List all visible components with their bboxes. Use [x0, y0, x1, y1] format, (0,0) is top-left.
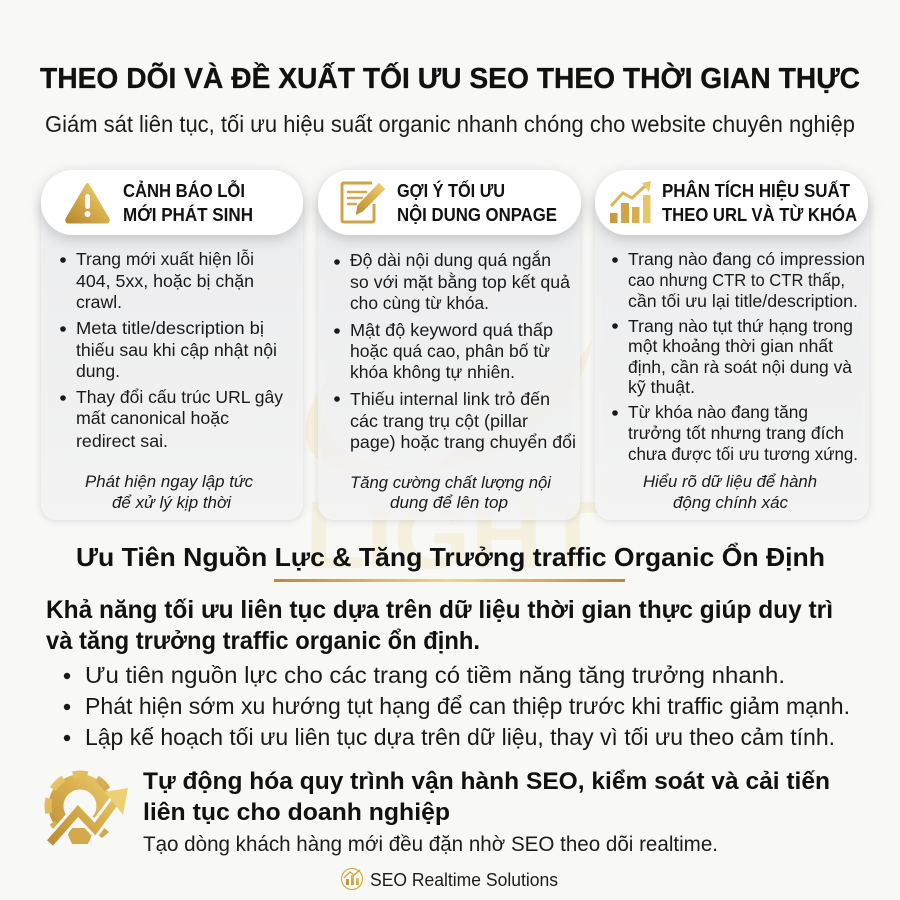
bullet list: hoặc quá cao, phân bố từ — [350, 341, 550, 361]
bullet list: dung. — [76, 361, 120, 381]
icon: bar chart with arrow — [610, 181, 651, 223]
lead statement — [46, 596, 833, 655]
bullet list: thiếu sau khi cập nhật nội — [76, 340, 277, 360]
benefit bullet list — [64, 662, 850, 750]
icon: gear with rising arrow — [40, 774, 128, 856]
bullet list: cao nhưng CTR to CTR thấp, — [628, 270, 845, 290]
lead statement: và tăng trưởng traffic organic ổn định. — [46, 627, 480, 655]
bullet list — [60, 248, 283, 451]
bullet list: chưa được tối ưu tương xứng. — [628, 444, 858, 464]
bullet list: Thay đổi cấu trúc URL gây — [76, 387, 283, 407]
benefit bullet list: Ưu tiên nguồn lực cho các trang có tiềm năng tăng trưởng nhanh. — [85, 662, 785, 688]
panel: phân tích hiệu suất — [595, 170, 869, 520]
heading — [397, 180, 557, 225]
benefit bullet list: Lập kế hoạch tối ưu liên tục dựa trên dữ liệu, thay vì tối ưu theo cảm tính. — [85, 724, 835, 750]
bullet list: khóa không tự nhiên. — [350, 362, 515, 382]
bullet list: 404, 5xx, hoặc bị chặn — [76, 271, 254, 291]
icon: warning triangle — [67, 184, 108, 222]
heading: CẢNH BÁO LỖI — [123, 180, 245, 201]
bullet list: crawl. — [76, 292, 122, 312]
bullet list — [334, 249, 576, 452]
heading: MỚI PHÁT SINH — [123, 204, 253, 225]
heading: PHÂN TÍCH HIỆU SUẤT — [662, 180, 851, 201]
bullet list — [612, 249, 865, 464]
gold underline — [274, 579, 625, 582]
section heading: Ưu Tiên Nguồn Lực & Tăng Trưởng traffic Organic Ổn Định — [76, 542, 825, 572]
title: THEO DÕI VÀ ĐỀ XUẤT TỐI ƯU SEO THEO THỜI GIAN THỰC — [40, 62, 860, 95]
bullet list: một khoảng thời gian nhất — [628, 336, 833, 356]
bullet list: Trang nào tụt thứ hạng trong — [628, 316, 853, 336]
bullet list: trưởng tốt nhưng trang đích — [628, 423, 844, 443]
bullet list: cần tối ưu lại title/description. — [628, 291, 858, 311]
heading — [123, 180, 253, 225]
subtitle: Giám sát liên tục, tối ưu hiệu suất organic nhanh chóng cho website chuyên nghiệp — [45, 111, 855, 137]
bullet list: page) hoặc trang chuyển đổi — [350, 432, 576, 452]
heading: THEO URL VÀ TỪ KHÓA — [662, 204, 857, 225]
footer brand: SEO Realtime Solutions — [370, 870, 558, 890]
lead statement: Khả năng tối ưu liên tục dựa trên dữ liệu thời gian thực giúp duy trì — [46, 596, 833, 624]
watermark — [305, 335, 603, 589]
watermark: LIGHT — [305, 482, 603, 589]
closing block: Tạo dòng khách hàng mới đều đặn nhờ SEO theo dõi realtime. — [143, 833, 718, 856]
bullet list: Mật độ keyword quá thấp — [350, 320, 553, 340]
heading: NỘI DUNG ONPAGE — [397, 204, 557, 225]
bullet list: Trang nào đang có impression — [628, 249, 865, 269]
closing block — [143, 768, 830, 856]
bullet list: mất canonical hoặc — [76, 408, 229, 428]
italic note — [643, 472, 817, 512]
benefit bullet list: Phát hiện sớm xu hướng tụt hạng để can thiệp trước khi traffic giảm mạnh. — [85, 693, 850, 719]
italic note — [350, 473, 552, 512]
panel: cảnh báo lỗi — [41, 170, 303, 520]
italic note: động chính xác — [673, 493, 788, 512]
closing block: liên tục cho doanh nghiệp — [143, 799, 450, 826]
bullet list: kỹ thuật. — [628, 377, 695, 397]
panel: gợi ý tối ưu — [318, 170, 581, 520]
italic note: Tăng cường chất lượng nội — [350, 473, 552, 492]
bullet list: so với mặt bằng top kết quả — [350, 271, 570, 292]
closing block: Tự động hóa quy trình vận hành SEO, kiểm soát và cải tiến — [143, 768, 830, 795]
heading — [662, 180, 857, 225]
bullet list: Meta title/description bị — [76, 318, 264, 338]
bullet list: các trang trụ cột (pillar — [350, 411, 528, 431]
bullet list: Trang mới xuất hiện lỗi — [76, 248, 254, 269]
bullet list: Độ dài nội dung quá ngắn — [350, 249, 551, 270]
bullet list: cho cùng từ khóa. — [350, 293, 489, 313]
icon: document and pencil — [342, 182, 386, 222]
bullet list: Thiếu internal link trỏ đến — [350, 389, 550, 409]
italic note: Hiểu rõ dữ liệu để hành — [643, 472, 817, 491]
italic note: Phát hiện ngay lập tức — [85, 472, 253, 491]
bullet list: Từ khóa nào đang tăng — [628, 402, 808, 422]
bullet list: redirect sai. — [76, 431, 168, 451]
bullet list: định, cần rà soát nội dung và — [628, 357, 852, 377]
italic note: để xử lý kịp thời — [112, 493, 232, 512]
heading: GỢI Ý TỐI ƯU — [397, 180, 505, 201]
italic note — [85, 472, 253, 512]
italic note: dung để lên top — [390, 493, 508, 512]
